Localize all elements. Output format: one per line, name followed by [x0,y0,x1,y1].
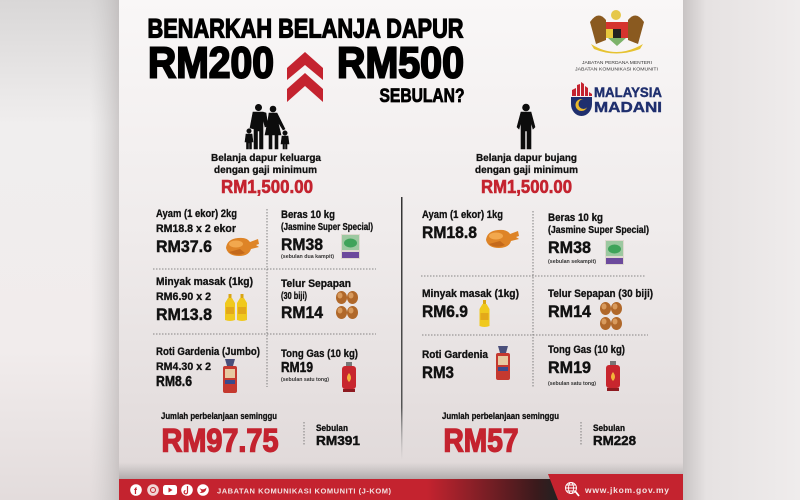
icon: crest [590,10,644,54]
item: chicken single: RM18.8 [422,223,477,242]
item: chicken family [156,208,259,256]
item: cooking oil single [422,288,519,327]
item: rice family [281,209,373,260]
single salary text: Belanja dapur bujang [476,152,577,164]
item: chicken family: RM37.6 [156,237,212,256]
item: chicken single [422,209,519,248]
panel: family items [153,208,376,393]
family salary text [211,152,321,197]
social icons [130,484,209,496]
logo: Malaysia Madani [571,82,662,116]
item: bread single [422,346,510,382]
total: family: Jumlah perbelanjaan seminggu [161,411,277,422]
single salary text [475,152,578,197]
item: rice single: Beras 10 kg [548,212,603,224]
item: chicken family: RM18.8 x 2 ekor [156,223,237,235]
total: family [161,411,360,458]
item: gas single: (sebulan satu tong) [548,381,596,387]
icon: single person [517,104,535,149]
divider between panels [401,197,402,460]
item: bread family [156,346,260,393]
total: single: RM57 [444,422,518,458]
icon: globe [566,482,579,496]
icon: family [245,104,289,149]
item: gas family: Tong Gas (10 kg) [281,348,358,360]
item: bread single: RM3 [422,363,454,382]
icon: red double chevron up [287,52,323,102]
item: rice single [548,212,649,265]
item: cooking oil family: RM13.8 [156,305,212,324]
item: cooking oil family: RM6.90 x 2 [156,291,211,303]
logo: Malaysia Madani: MADANI [594,99,662,116]
total: family: Sebulan [316,423,348,434]
item: gas single: RM19 [548,358,591,377]
item: rice single: RM38 [548,238,591,257]
item: gas single: Tong Gas (10 kg) [548,344,625,356]
item: rice single: (sebulan sekampit) [548,259,596,265]
title [148,14,464,107]
total: single [442,411,636,458]
item: eggs family [281,278,358,322]
item: eggs family: (30 biji) [281,291,307,302]
title: BENARKAH BELANJA DAPUR [148,14,464,44]
item: bread single: Roti Gardenia [422,349,489,361]
item: chicken family: Ayam (1 ekor) 2kg [156,208,237,220]
item: rice family: (sebulan dua kampit) [281,254,334,260]
item: eggs single: Telur Sepapan (30 biji) [548,288,653,300]
item: rice single: (Jasmine Super Special) [548,225,649,236]
social icons: f [134,486,138,496]
total: single: Sebulan [593,423,625,434]
ministry text [575,60,658,72]
logo: Malaysia Madani: MALAYSIA [594,84,662,100]
item: eggs family: Telur Sepapan [281,278,351,290]
family salary text: Belanja dapur keluarga [211,152,321,164]
single salary text: dengan gaji minimum [475,164,578,176]
ministry text: JABATAN PERDANA MENTERI [582,60,652,65]
ministry text: JABATAN KOMUNIKASI KOMUNITI [575,66,658,72]
single salary text: RM1,500.00 [481,177,572,197]
item: cooking oil single: Minyak masak (1kg) [422,288,519,300]
panel: infographic card [119,0,683,479]
total: family: RM391 [316,433,360,448]
title: RM200 [148,38,274,88]
family salary text: dengan gaji minimum [214,164,317,176]
item: rice family: (Jasmine Super Special) [281,222,373,233]
item: bread family: RM4.30 x 2 [156,361,211,373]
footer band [119,474,683,500]
title: SEBULAN? [380,86,464,107]
website: www.jkom.gov.my [584,485,669,495]
item: gas family [281,348,358,392]
footer label: JABATAN KOMUNIKASI KOMUNITI (J-KOM) [217,486,392,496]
item: cooking oil family [156,276,253,324]
total: single: Jumlah perbelanjaan seminggu [442,411,559,422]
item: gas family: (sebulan satu tong) [281,377,329,383]
title: RM500 [337,38,464,88]
panel: single items [421,209,653,391]
item: eggs single [548,288,653,330]
item: cooking oil family: Minyak masak (1kg) [156,276,253,288]
family salary text: RM1,500.00 [221,177,313,197]
item: bread family: Roti Gardenia (Jumbo) [156,346,260,358]
item: cooking oil single: RM6.9 [422,302,468,321]
item: chicken single: Ayam (1 ekor) 1kg [422,209,503,221]
total: family: RM97.75 [162,422,278,458]
item: gas family: RM19 [281,360,313,376]
item: rice family: RM38 [281,235,323,254]
item: bread family: RM8.6 [156,374,192,390]
item: eggs family: RM14 [281,303,323,322]
item: eggs single: RM14 [548,302,592,321]
total: single: RM228 [593,433,636,448]
item: gas single [548,344,625,391]
item: rice family: Beras 10 kg [281,209,335,221]
